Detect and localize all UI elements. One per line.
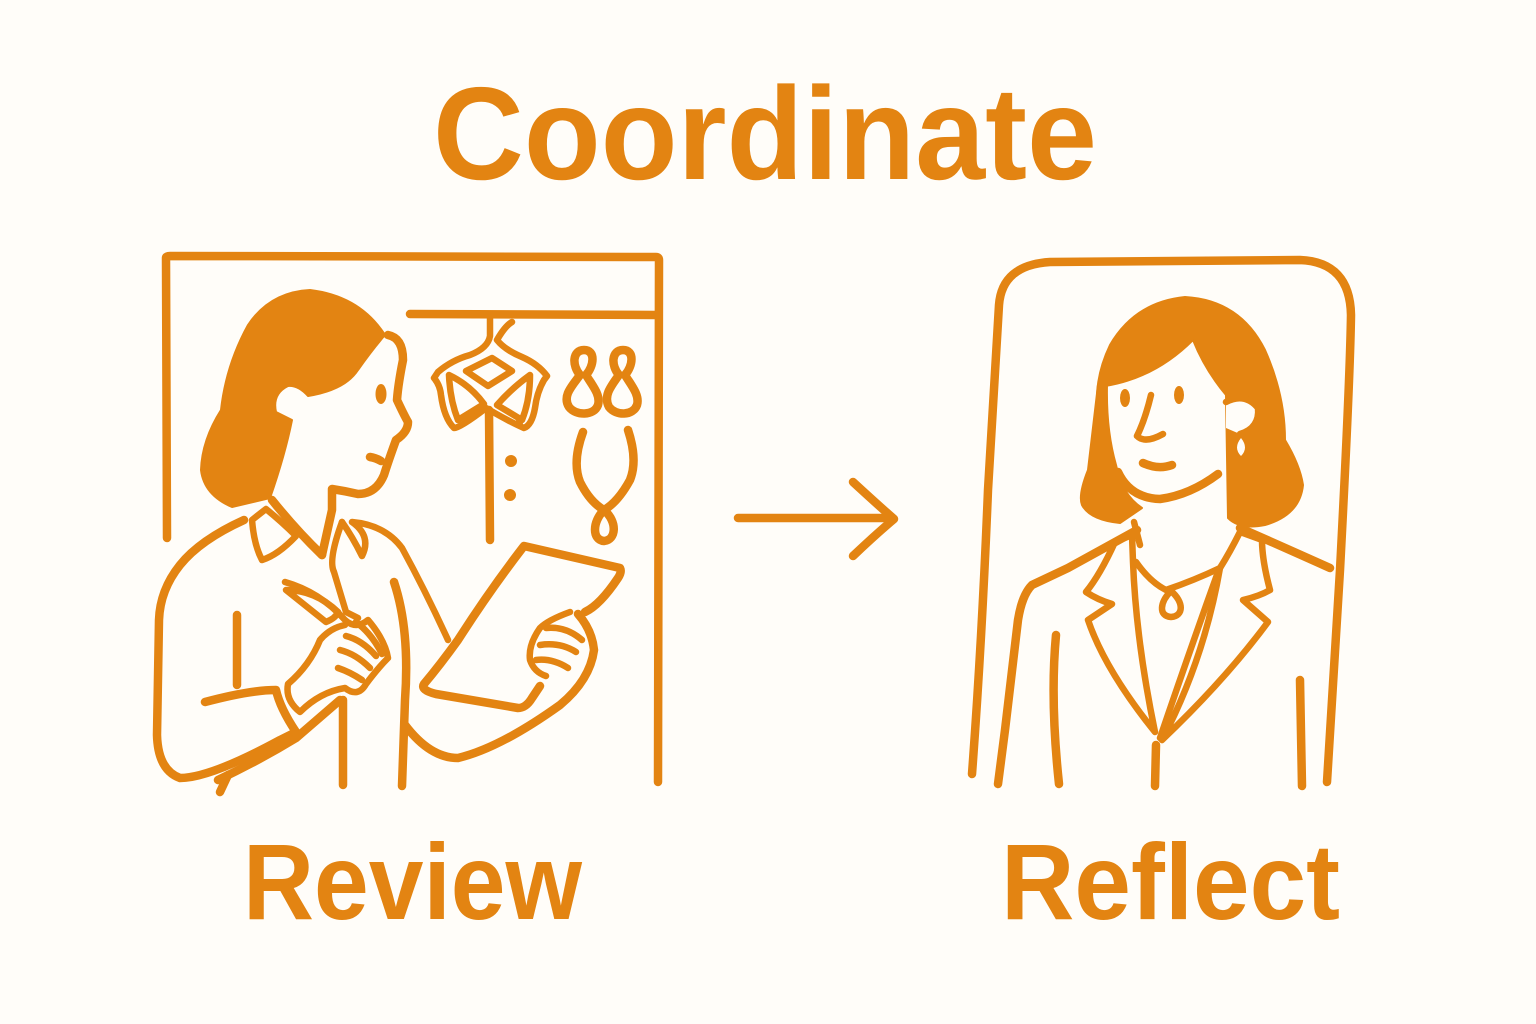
reviewing woman: hair	[201, 290, 385, 507]
reflected woman: face	[1118, 387, 1258, 499]
jewellery: earrings	[567, 350, 638, 414]
panel: review illustration	[157, 256, 659, 792]
review frame	[166, 256, 659, 782]
label: review: Review	[243, 821, 583, 942]
reviewing woman: torso and collar	[157, 509, 594, 792]
panel: reflect illustration	[972, 260, 1351, 786]
clothing rail and garment	[410, 314, 656, 540]
writing hand and pen	[285, 582, 388, 712]
reviewing woman: face	[272, 335, 408, 555]
blazer and shoulders	[998, 522, 1330, 786]
pendant necklace	[1162, 591, 1181, 617]
title: Coordinate	[433, 60, 1097, 207]
mirror frame	[972, 260, 1351, 782]
holding hand	[530, 612, 582, 676]
reflected woman: hair	[1081, 297, 1303, 526]
jewellery: necklace	[577, 430, 634, 541]
label: reflect: Reflect	[1001, 821, 1340, 942]
clipboard	[423, 546, 621, 708]
arrow	[738, 482, 894, 556]
